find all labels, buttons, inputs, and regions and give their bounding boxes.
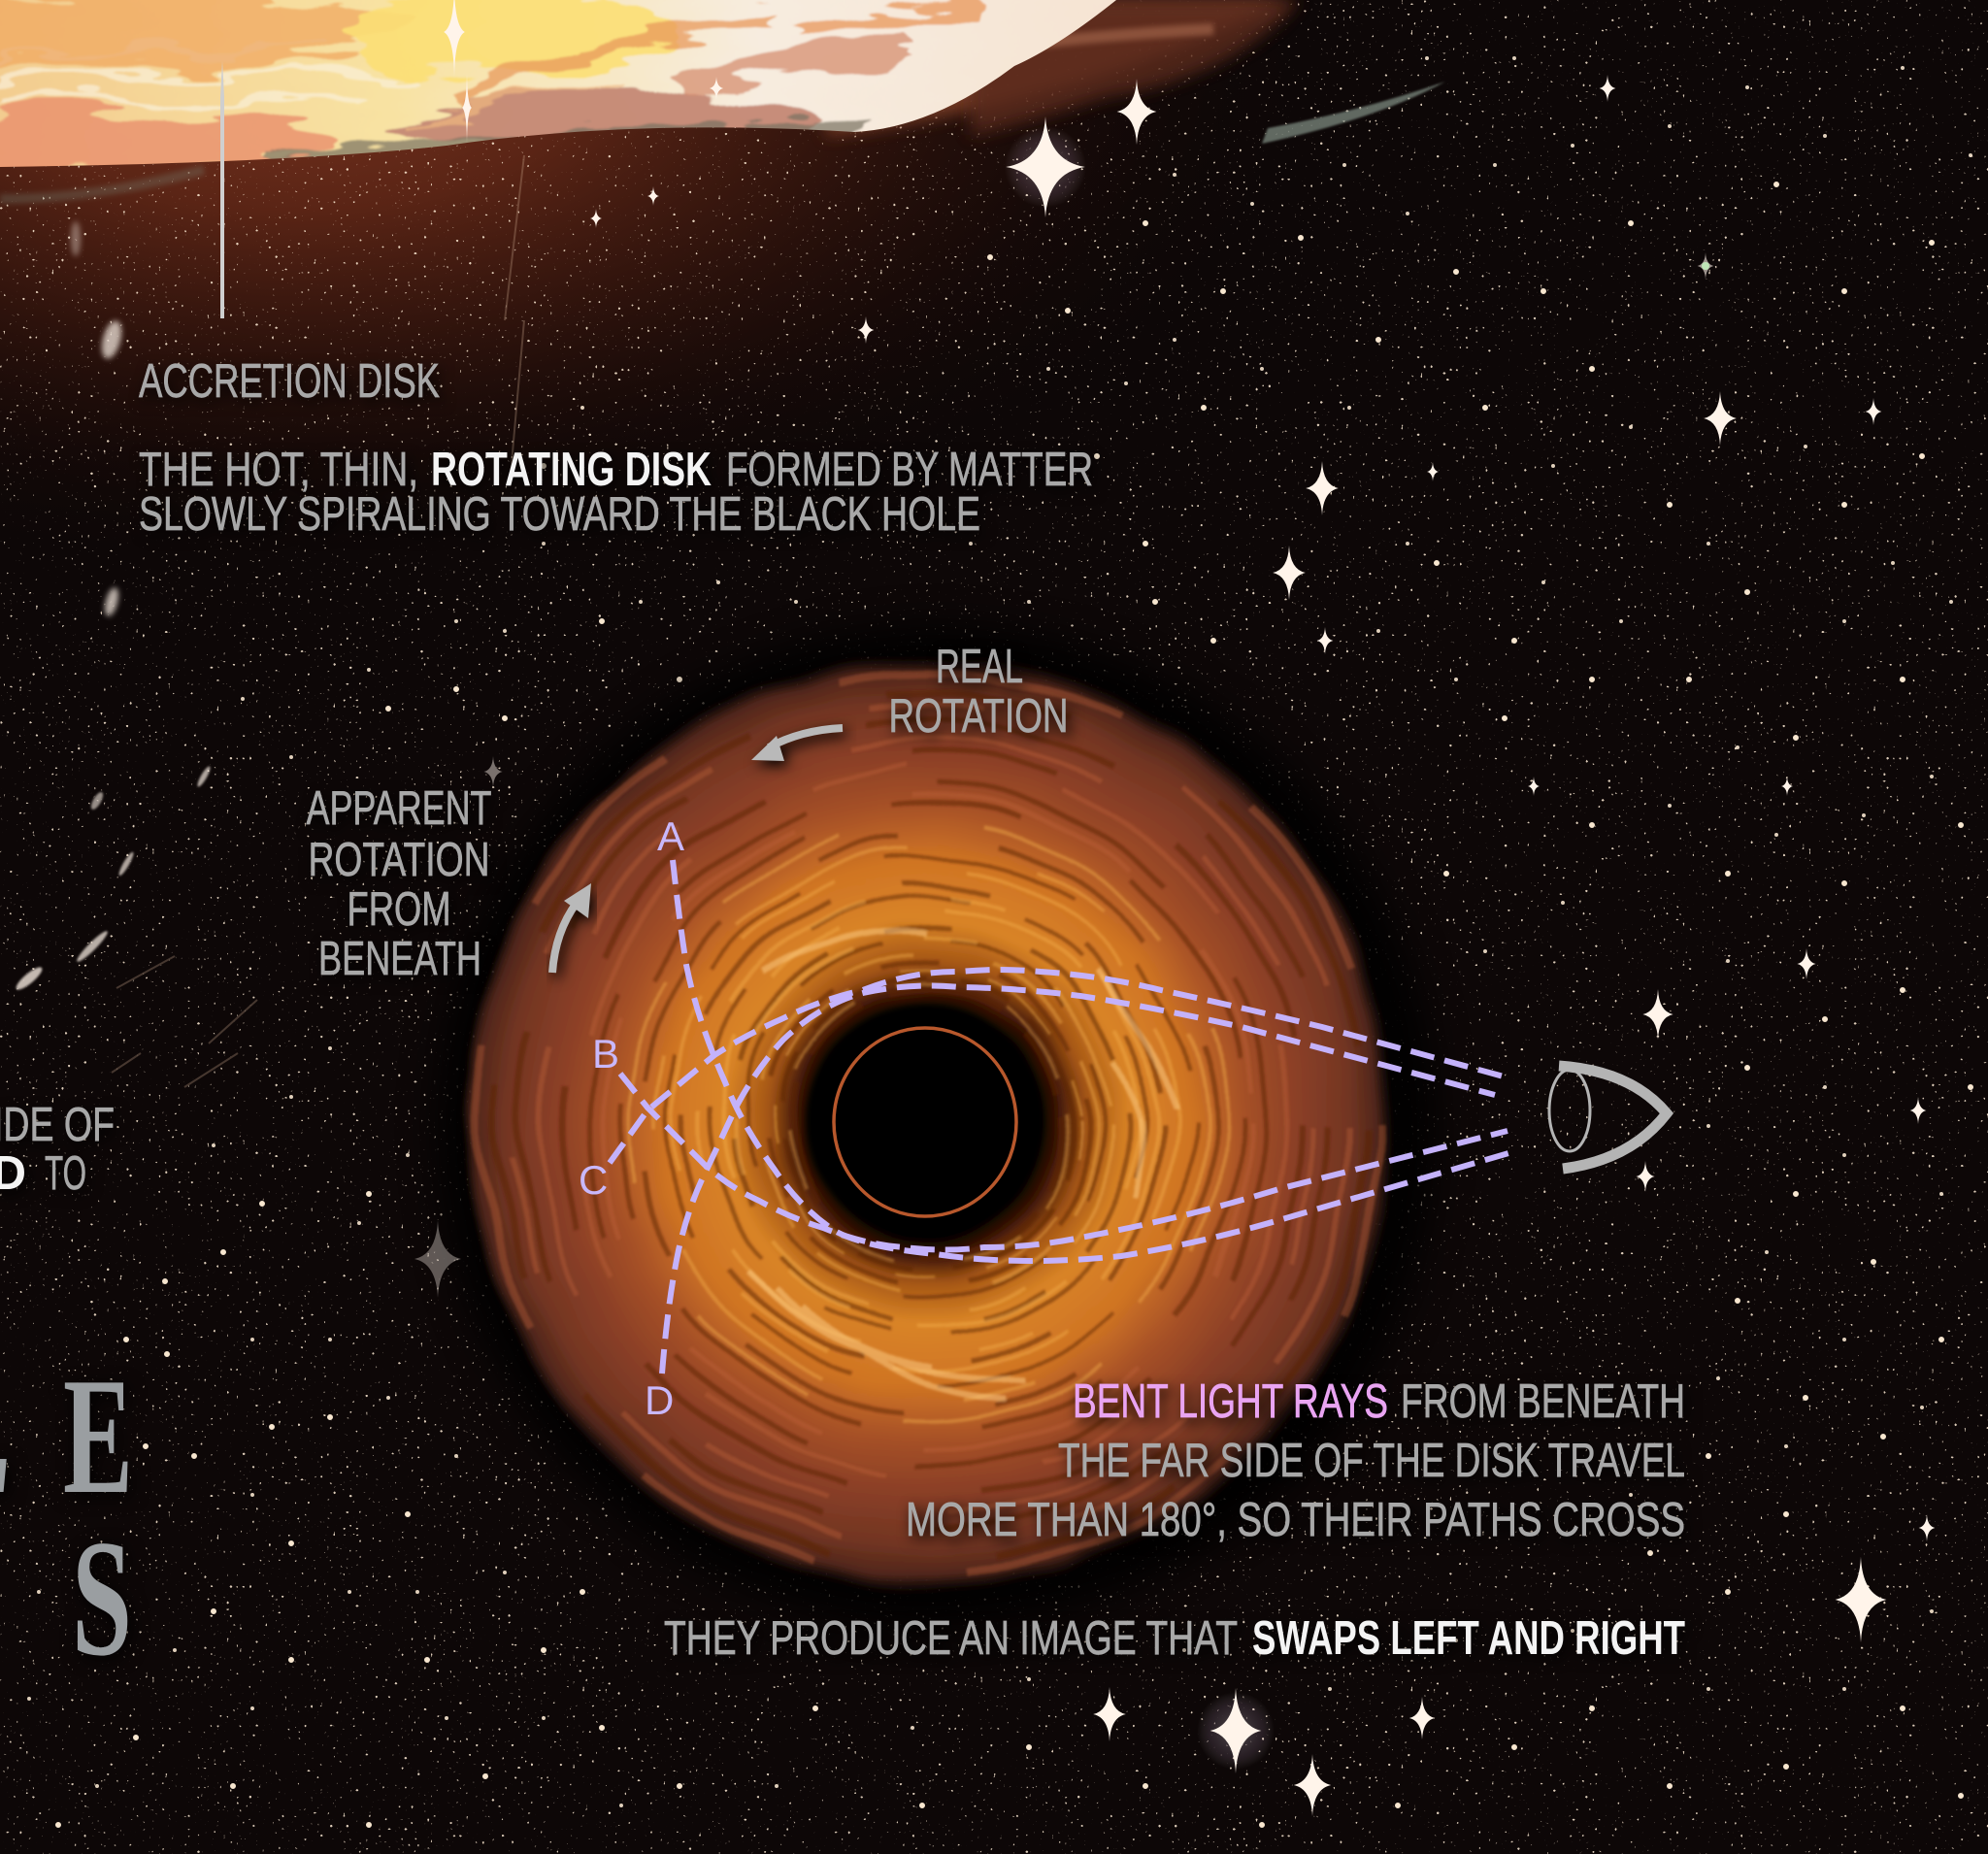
light streak stars, left side	[14, 155, 524, 1087]
apparent rotation arrow	[552, 883, 591, 973]
title letters cropped on left edge	[0, 1344, 133, 1691]
accretion disk description: THE HOT, THIN,	[139, 444, 418, 496]
apparent rotation label: ROTATION	[309, 834, 489, 886]
pointer line to accretion disk	[220, 61, 224, 318]
black hole shadow and photon ring	[834, 1028, 1016, 1216]
bent light rays explanation: BENT LIGHT RAYS	[1073, 1375, 1388, 1428]
ray labels A B C D: C	[579, 1157, 608, 1203]
apparent rotation label: FROM	[348, 883, 450, 936]
image swap explanation: SWAPS LEFT AND RIGHT	[1252, 1612, 1685, 1665]
ray labels A B C D: B	[592, 1031, 619, 1076]
apparent rotation label: APPARENT	[307, 782, 491, 835]
ray labels A B C D: D	[645, 1377, 674, 1423]
accretion disk description	[139, 444, 1093, 541]
accretion disk description: FORMED BY MATTER	[726, 444, 1093, 496]
title letters cropped on left edge: S	[72, 1506, 132, 1691]
real rotation arrow	[751, 728, 843, 761]
bent light rays explanation	[906, 1375, 1685, 1546]
lensed black hole disk	[466, 654, 1394, 1594]
apparent rotation label	[307, 782, 491, 985]
real rotation label	[889, 641, 1068, 743]
bent light rays explanation: MORE THAN 180°, SO THEIR PATHS CROSS	[906, 1494, 1685, 1546]
title letters cropped on left edge: E	[63, 1344, 133, 1529]
real rotation label: REAL	[936, 641, 1023, 693]
dark halo behind black hole disk	[437, 626, 1437, 1626]
ray labels A B C D: A	[657, 813, 684, 859]
accretion disk: bright upper band	[0, 0, 1445, 199]
bright four-point stars	[414, 0, 1935, 1816]
icon: observer eye	[1549, 1066, 1667, 1169]
bent light rays explanation: THE FAR SIDE OF THE DISK TRAVEL	[1058, 1435, 1685, 1487]
accretion disk description: ROTATING DISK	[431, 444, 712, 496]
bent light ray paths	[610, 860, 1515, 1374]
cropped text on left edge	[0, 1099, 115, 1200]
cropped text on left edge: TO	[45, 1147, 86, 1200]
ray labels A B C D	[579, 813, 684, 1423]
accretion disk label: ACCRETION DISK	[139, 355, 440, 408]
bent light rays explanation: FROM BENEATH	[1401, 1375, 1685, 1428]
apparent rotation label: BENEATH	[318, 933, 481, 985]
accretion disk description: SLOWLY SPIRALING TOWARD THE BLACK HOLE	[139, 488, 980, 541]
image swap explanation: THEY PRODUCE AN IMAGE THAT	[664, 1612, 1238, 1665]
real rotation label: ROTATION	[889, 690, 1068, 743]
